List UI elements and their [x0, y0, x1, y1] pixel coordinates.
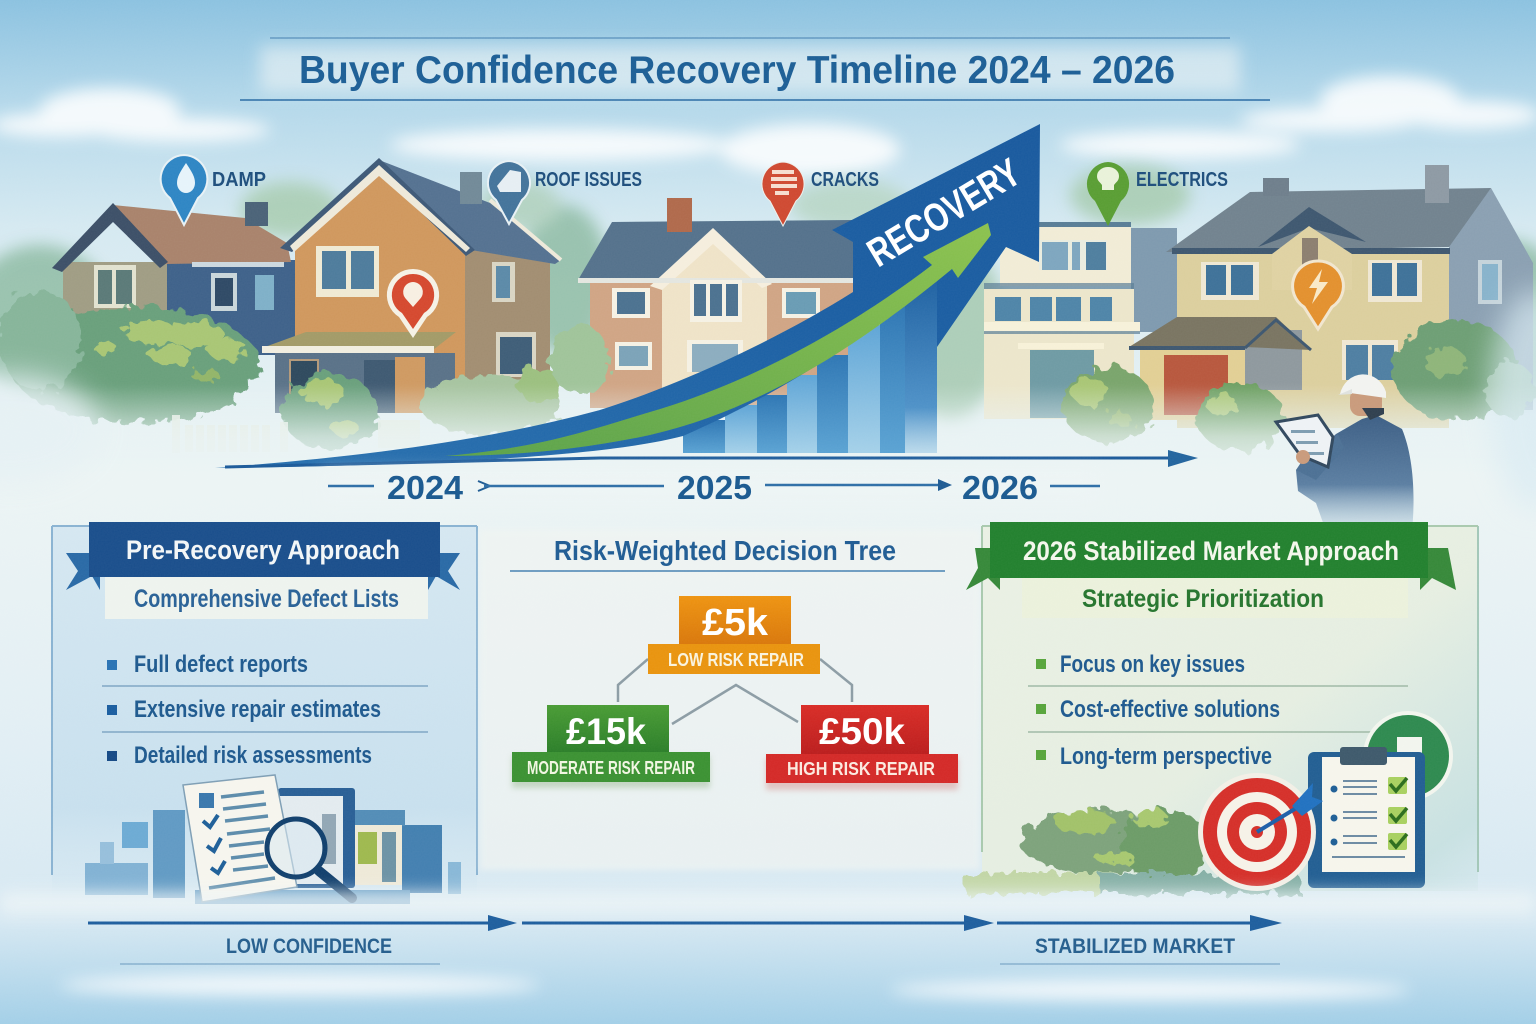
subheading [1022, 578, 1408, 618]
ribbon heading [66, 522, 460, 590]
recovery arrow [215, 124, 1040, 468]
house: right stone house [1129, 165, 1533, 428]
ribbon heading [966, 522, 1456, 590]
pin: brick house marker [387, 269, 439, 338]
pin: damp [161, 155, 266, 225]
node: low risk: £5k [702, 602, 769, 644]
pin: damp: DAMP [212, 169, 266, 191]
neighbourhood illustration [0, 158, 1536, 510]
pin: electrics [1087, 162, 1228, 226]
year markers: 2026 [962, 469, 1038, 506]
recovery arrow: RECOVERY [860, 150, 1029, 276]
pin: cracks [762, 162, 879, 226]
bullet list: Cost-effective solutions [1060, 696, 1280, 723]
icon: chart badge [1365, 713, 1451, 799]
house: left stone house [52, 202, 295, 357]
node: moderate risk: £15k [566, 711, 646, 752]
ribbon heading: Pre-Recovery Approach [126, 535, 400, 565]
bullet list [102, 651, 428, 769]
chart bars under the recovery arrow [683, 270, 937, 453]
subheading [105, 577, 428, 619]
fog at right edge [1490, 290, 1536, 510]
subheading: Strategic Prioritization [1082, 585, 1324, 613]
icon: documents and magnifier [85, 775, 461, 904]
icon: target with dart [1198, 773, 1323, 891]
bullet list [1028, 651, 1408, 770]
title: Buyer Confidence Recovery Timeline 2024 – 2026 [299, 49, 1175, 92]
green arrow [445, 223, 991, 456]
panel: pre-recovery approach [52, 522, 477, 904]
node: high risk: £50k [819, 711, 905, 752]
bullet list: Long-term perspective [1060, 743, 1272, 770]
bullet list: Focus on key issues [1060, 651, 1245, 678]
house: centre house [578, 198, 853, 408]
house: modern white house [984, 222, 1177, 419]
house: brick house with pin [262, 158, 561, 413]
fog over lower scene [0, 385, 1536, 480]
node: moderate risk [512, 705, 710, 788]
year markers [320, 469, 1100, 506]
node: high risk: HIGH RISK REPAIR [787, 759, 935, 779]
node: moderate risk: MODERATE RISK REPAIR [527, 758, 695, 778]
label: low confidence: LOW CONFIDENCE [226, 935, 392, 958]
fog at left edge [0, 375, 100, 485]
subheading: Comprehensive Defect Lists [134, 585, 399, 613]
pin: electrics: ELECTRICS [1136, 169, 1228, 191]
background trees [0, 165, 1536, 420]
panel: 2026 stabilized market approach [965, 522, 1478, 894]
bullet list: Detailed risk assessments [134, 742, 372, 769]
pin: roof issues: ROOF ISSUES [535, 169, 642, 191]
node: low risk: LOW RISK REPAIR [668, 650, 804, 670]
year markers: 2025 [677, 469, 752, 506]
pin: cracks: CRACKS [811, 169, 879, 191]
title [240, 38, 1270, 100]
heading: Risk-Weighted Decision Tree [554, 535, 896, 566]
label: stabilized market: STABILIZED MARKET [1035, 935, 1235, 958]
pin: roof issues [488, 161, 642, 224]
tree connectors [618, 659, 852, 724]
shrubs [0, 290, 1535, 451]
pin: right house marker [1293, 261, 1343, 329]
timeline axis arrow [225, 450, 1198, 467]
icon: clipboard checklist [1308, 747, 1425, 888]
node: low risk [648, 596, 820, 674]
inspector [1276, 374, 1414, 531]
bottom progress arrows [88, 915, 1282, 931]
green bushes [965, 809, 1300, 894]
ribbon heading: 2026 Stabilized Market Approach [1023, 536, 1399, 566]
bullet list: Extensive repair estimates [134, 696, 381, 723]
year markers: 2024 [387, 469, 464, 506]
panel: risk-weighted decision tree [480, 530, 980, 870]
bullet list: Full defect reports [134, 651, 308, 678]
fence [172, 415, 420, 453]
bottom fog [0, 892, 1536, 914]
node: high risk [766, 705, 958, 790]
